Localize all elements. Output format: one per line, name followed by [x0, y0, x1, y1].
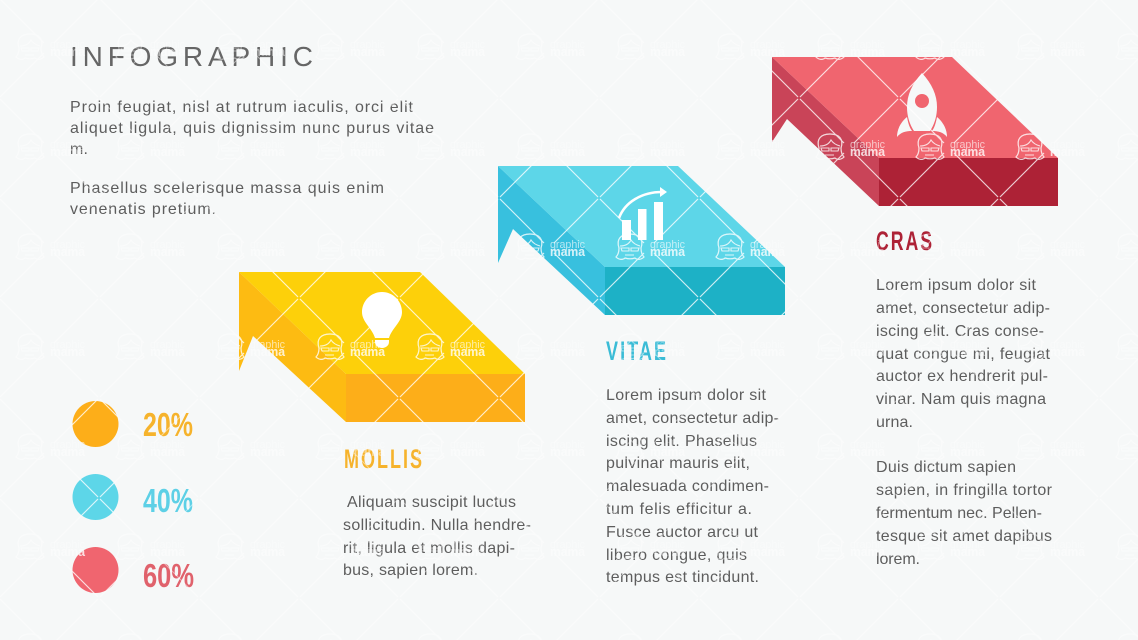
text block: mollis: bus, sapien lorem. [343, 562, 478, 579]
text block: cras: iscing elit. Cras conse- [876, 323, 1044, 340]
intro text block: Phasellus scelerisque massa quis enim [70, 180, 384, 197]
intro text block [70, 99, 434, 218]
text block: vitae: Lorem ipsum dolor sit [606, 387, 767, 404]
text block: vitae: tum felis efficitur a. [606, 501, 752, 518]
text block: vitae: Fusce auctor arcu ut [606, 524, 759, 541]
text block: cras [876, 277, 1053, 568]
text block: vitae: amet, consectetur adip- [606, 410, 779, 427]
legend: 20% [72, 401, 193, 447]
intro text block: aliquet ligula, quis dignissim nunc purus vitae [70, 120, 434, 137]
text block: vitae: tempus est tincidunt. [606, 569, 759, 586]
text block: vitae: iscing elit. Phasellus [606, 433, 757, 450]
icon: rocket [897, 73, 947, 137]
text block: cras: Duis dictum sapien [876, 459, 1016, 476]
heading: vitae: VITAE [606, 336, 668, 366]
icon: growth chart [619, 187, 667, 240]
text block: vitae: malesuada condimen- [606, 478, 769, 495]
text block: vitae: pulvinar mauris elit, [606, 455, 750, 472]
text block: cras: tesque sit amet dapibus [876, 528, 1052, 545]
text block: vitae [606, 387, 779, 586]
text block: cras: urna. [876, 414, 913, 431]
intro text block: Proin feugiat, nisl at rutrum iaculis, orci elit [70, 99, 414, 116]
intro text block: m. [70, 141, 88, 158]
text block: cras: sapien, in fringilla tortor [876, 482, 1053, 499]
panel: yellow arrow block [239, 272, 525, 422]
intro text block: venenatis pretium. [70, 201, 216, 218]
text block: cras: amet, consectetur adip- [876, 300, 1050, 317]
text block: cras: Lorem ipsum dolor sit [876, 277, 1037, 294]
text block: cras: auctor ex hendrerit pul- [876, 368, 1048, 385]
text block: vitae: libero congue, quis [606, 547, 747, 564]
watermark overlay on coloured panels [72, 57, 1056, 593]
heading: mollis: MOLLIS [344, 444, 424, 474]
text block: cras: lorem. [876, 551, 920, 568]
legend: 60%: 60% [143, 557, 194, 594]
panel: blue arrow block [498, 166, 785, 315]
text block: cras: quat congue mi, feugiat [876, 346, 1051, 363]
icon: light bulb [362, 292, 402, 348]
legend: 20%: 20% [143, 406, 193, 443]
legend: 60% [72, 547, 194, 594]
text block: mollis: rit, ligula et mollis dapi- [343, 540, 515, 557]
panel: red arrow block [772, 57, 1058, 206]
text block: mollis [343, 494, 531, 579]
text block: mollis: sollicitudin. Nulla hendre- [343, 517, 531, 534]
title: INFOGRAPHIC [70, 41, 313, 72]
text block: cras: vinar. Nam quis magna [876, 391, 1046, 408]
legend: 40% [72, 474, 193, 520]
heading: cras: CRAS [876, 226, 934, 256]
legend: 40%: 40% [143, 482, 193, 519]
text block: mollis: Aliquam suscipit luctus [347, 494, 516, 511]
text block: cras: fermentum nec. Pellen- [876, 505, 1042, 522]
